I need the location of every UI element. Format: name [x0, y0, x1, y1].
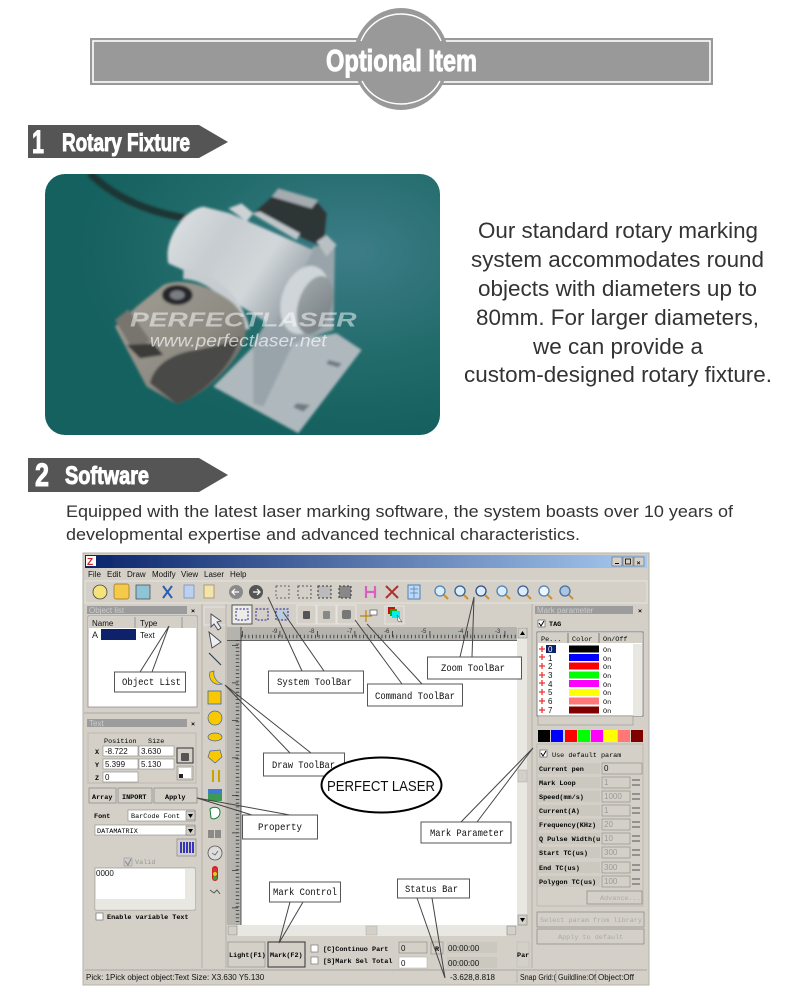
callout: mark parameter — [421, 748, 533, 843]
panel: text properties: Valid — [135, 859, 155, 867]
drawing canvas with rulers: -6 — [384, 629, 390, 635]
photo: rotary fixture — [45, 173, 440, 435]
panel: text properties: 3.630 — [141, 747, 162, 756]
panel: mark parameter: Advance... — [600, 895, 641, 903]
panel: object list: × — [191, 608, 195, 616]
panel: mark parameter: 300 — [604, 863, 618, 872]
panel: text properties: -8.722 — [105, 747, 128, 756]
section heading: software: 2 — [35, 457, 49, 493]
panel: object list: Type — [140, 619, 158, 628]
panel: mark parameter: Start TC(us) — [539, 850, 588, 858]
photo: rotary fixture: www.perfectlaser.net — [150, 331, 328, 351]
drawing canvas with rulers: -7 — [347, 629, 353, 635]
callout: command toolbar — [355, 620, 462, 706]
rotary fixture description: custom-designed rotary fixture. — [464, 362, 772, 387]
title banner — [90, 8, 713, 110]
panel: mark parameter: 1 — [604, 806, 609, 815]
mark controls: [C]Continuo — [323, 946, 368, 954]
panel: mark parameter: × — [638, 608, 642, 616]
rotary fixture description — [464, 218, 772, 387]
software description: Equipped with the latest laser marking software, the system boasts over 10 years of — [66, 502, 733, 521]
drawing canvas with rulers: -3 — [495, 629, 501, 635]
panel: mark parameter: 4 — [548, 680, 553, 689]
status bar: Object:Off — [598, 973, 635, 982]
panel: mark parameter: On/Off — [603, 636, 627, 644]
panel: object list — [87, 606, 197, 707]
panel: mark parameter: On — [603, 708, 611, 716]
callout: object list: Object List — [122, 677, 181, 689]
drawing canvas with rulers: -8 — [309, 629, 315, 635]
panel: mark parameter: On — [603, 682, 611, 690]
panel: mark parameter: Mark parameter — [537, 606, 594, 615]
callout: mark control: Mark Control — [273, 887, 337, 899]
mark controls: Par — [517, 952, 529, 960]
menu bar: Draw — [127, 570, 146, 579]
mark controls: 0 — [401, 959, 406, 968]
callout: property — [197, 798, 318, 839]
status bar: Snap Grid:( — [520, 973, 556, 982]
panel: text properties: BarCode Font — [131, 813, 180, 821]
panel: object list: Text — [140, 631, 155, 640]
rotary fixture description: 80mm. For larger diameters, — [476, 305, 759, 330]
software screenshot — [83, 553, 649, 985]
panel: object list: A — [92, 630, 98, 640]
panel: mark parameter: 7 — [548, 706, 553, 715]
panel: mark parameter: On — [603, 690, 611, 698]
callout: draw toolbar: Draw ToolBar — [272, 760, 335, 772]
menu bar: Help — [230, 570, 247, 579]
drawing canvas with rulers: -9 — [272, 629, 278, 635]
panel: mark parameter: 10 — [604, 834, 613, 843]
panel: mark parameter: Select param from library — [540, 917, 642, 925]
panel: text properties: × — [191, 721, 195, 729]
panel: mark parameter: 100 — [604, 877, 618, 886]
panel: mark parameter: 0 — [548, 645, 553, 654]
callout: zoom toolbar: Zoom ToolBar — [441, 663, 505, 675]
callout: mark control — [270, 882, 340, 943]
mark controls — [228, 942, 529, 968]
panel: mark parameter — [535, 606, 644, 944]
software description — [66, 502, 733, 544]
callout: property: Property — [258, 822, 302, 834]
panel: mark parameter: Current(A) — [539, 808, 580, 816]
panel: mark parameter: 20 — [604, 820, 613, 829]
section heading: rotary fixture: 1 — [32, 124, 44, 160]
panel: text properties: X — [95, 749, 100, 757]
menu bar: View — [181, 570, 198, 579]
panel: mark parameter: On — [603, 647, 611, 655]
brand ellipse — [322, 758, 442, 812]
panel: mark parameter: 2 — [548, 662, 553, 671]
photo: rotary fixture: PERFECTLASER — [130, 309, 357, 332]
panel: text properties: INPORT — [122, 794, 146, 802]
panel: mark parameter: 1000 — [604, 792, 622, 801]
mark controls: R — [435, 946, 440, 954]
panel: mark parameter: Apply to default — [558, 934, 623, 942]
callout: draw toolbar — [225, 685, 344, 776]
panel: object list: Object list — [89, 606, 125, 615]
panel: mark parameter: On — [603, 656, 611, 664]
mark controls: 00:00:00 — [448, 959, 480, 968]
panel: mark parameter: On — [603, 664, 611, 672]
drawing canvas with rulers — [202, 604, 532, 968]
title banner: Optional Item — [326, 43, 477, 78]
rotary fixture description: objects with diameters up to — [478, 276, 757, 301]
panel: mark parameter: 1 — [548, 654, 553, 663]
mark controls: 00:00:00 — [448, 944, 480, 953]
rotary fixture description: we can provide a — [532, 334, 704, 359]
panel: mark parameter: Frequency(KHz) — [539, 822, 596, 830]
panel: mark parameter: Mark Loop — [539, 780, 576, 788]
menu bar — [88, 570, 247, 579]
panel: text properties: Array — [92, 794, 112, 802]
window title bar: × — [636, 560, 641, 568]
callout: zoom toolbar — [428, 597, 522, 679]
panel: text properties: Enable variable Text — [107, 914, 189, 922]
callout: system toolbar — [268, 597, 364, 693]
drawing canvas with rulers: -5 — [421, 629, 427, 635]
main toolbar — [85, 581, 647, 603]
pen colour swatches — [538, 730, 643, 742]
callout: system toolbar: System ToolBar — [277, 677, 352, 689]
panel: mark parameter: Current pen — [539, 766, 584, 774]
callout: status bar: Status Bar — [405, 884, 458, 896]
callout: object list — [114, 626, 186, 692]
panel: mark parameter: 3 — [548, 671, 553, 680]
callout: status bar — [398, 879, 470, 978]
panel: text properties: 5.399 — [105, 760, 126, 769]
mark controls: 0 — [401, 944, 406, 953]
panel: text properties: DATAMATRIX — [97, 828, 138, 836]
panel: mark parameter: Pe... — [541, 636, 561, 644]
brand ellipse: PERFECT LASER — [327, 778, 435, 795]
panel: text properties: 0 — [105, 773, 110, 782]
panel: mark parameter: Polygon TC(us) — [539, 879, 596, 887]
software description: developmental expertise and advanced technical characteristics. — [66, 525, 580, 544]
drawing toolbar — [204, 607, 226, 894]
panel: mark parameter: Speed(mm/s) — [539, 794, 584, 802]
panel: mark parameter: Color — [572, 636, 592, 644]
section heading: software: Software — [65, 462, 149, 490]
panel: text properties: Y — [95, 762, 100, 770]
section heading: software — [28, 457, 228, 493]
status bar: Guildline:Of — [558, 973, 597, 982]
panel: text properties: Text — [89, 719, 104, 728]
command toolbar — [232, 605, 404, 624]
status bar: Pick: 1Pick object object:Text Size: X3.630 Y5.130 — [86, 973, 265, 982]
window title bar: Z — [87, 557, 93, 568]
panel: mark parameter: On — [603, 699, 611, 707]
menu bar: Laser — [204, 570, 224, 579]
panel: object list: Name — [92, 619, 114, 628]
status bar: -3.628,8.818 — [450, 973, 495, 982]
panel: text properties: Size — [148, 738, 164, 746]
mark controls: [S]Mark Sel — [323, 958, 368, 966]
panel: mark parameter: Use default param — [552, 752, 621, 760]
mark controls: Light(F1) — [229, 952, 266, 960]
callout: command toolbar: Command ToolBar — [375, 691, 455, 703]
panel: mark parameter: 6 — [548, 697, 553, 706]
drawing canvas with rulers: -4 — [458, 629, 464, 635]
panel: text properties: Font — [94, 813, 110, 821]
panel: text properties: 0000 — [96, 869, 114, 878]
panel: text properties: 5.130 — [141, 760, 162, 769]
panel: mark parameter: On — [603, 673, 611, 681]
panel: text properties: Apply — [165, 794, 185, 802]
panel: text properties: Position — [104, 738, 137, 746]
status bar — [85, 970, 647, 983]
panel: mark parameter: End TC(us) — [539, 865, 580, 873]
panel: mark parameter: 5 — [548, 688, 553, 697]
menu bar: File — [88, 570, 101, 579]
mark controls: Part — [372, 946, 388, 954]
panel: mark parameter: 300 — [604, 848, 618, 857]
rotary fixture description: Our standard rotary marking — [478, 218, 758, 243]
panel: mark parameter: Q Pulse Width(u — [539, 836, 600, 844]
panel: mark parameter: 1 — [604, 778, 609, 787]
panel: mark parameter: TAG — [549, 621, 561, 629]
mark controls: Total — [372, 958, 392, 966]
callout: mark parameter: Mark Parameter — [430, 828, 504, 840]
panel: text properties: Z — [95, 775, 99, 783]
mark controls: Mark(F2) — [270, 952, 303, 960]
section heading: rotary fixture: Rotary Fixture — [62, 129, 190, 157]
window title bar — [85, 555, 647, 568]
menu bar: Modify — [152, 570, 176, 579]
panel: mark parameter: 0 — [604, 764, 609, 773]
section heading: rotary fixture — [28, 124, 228, 160]
rotary fixture description: system accommodates round — [471, 247, 764, 272]
panel: text properties — [84, 713, 200, 922]
menu bar: Edit — [107, 570, 122, 579]
